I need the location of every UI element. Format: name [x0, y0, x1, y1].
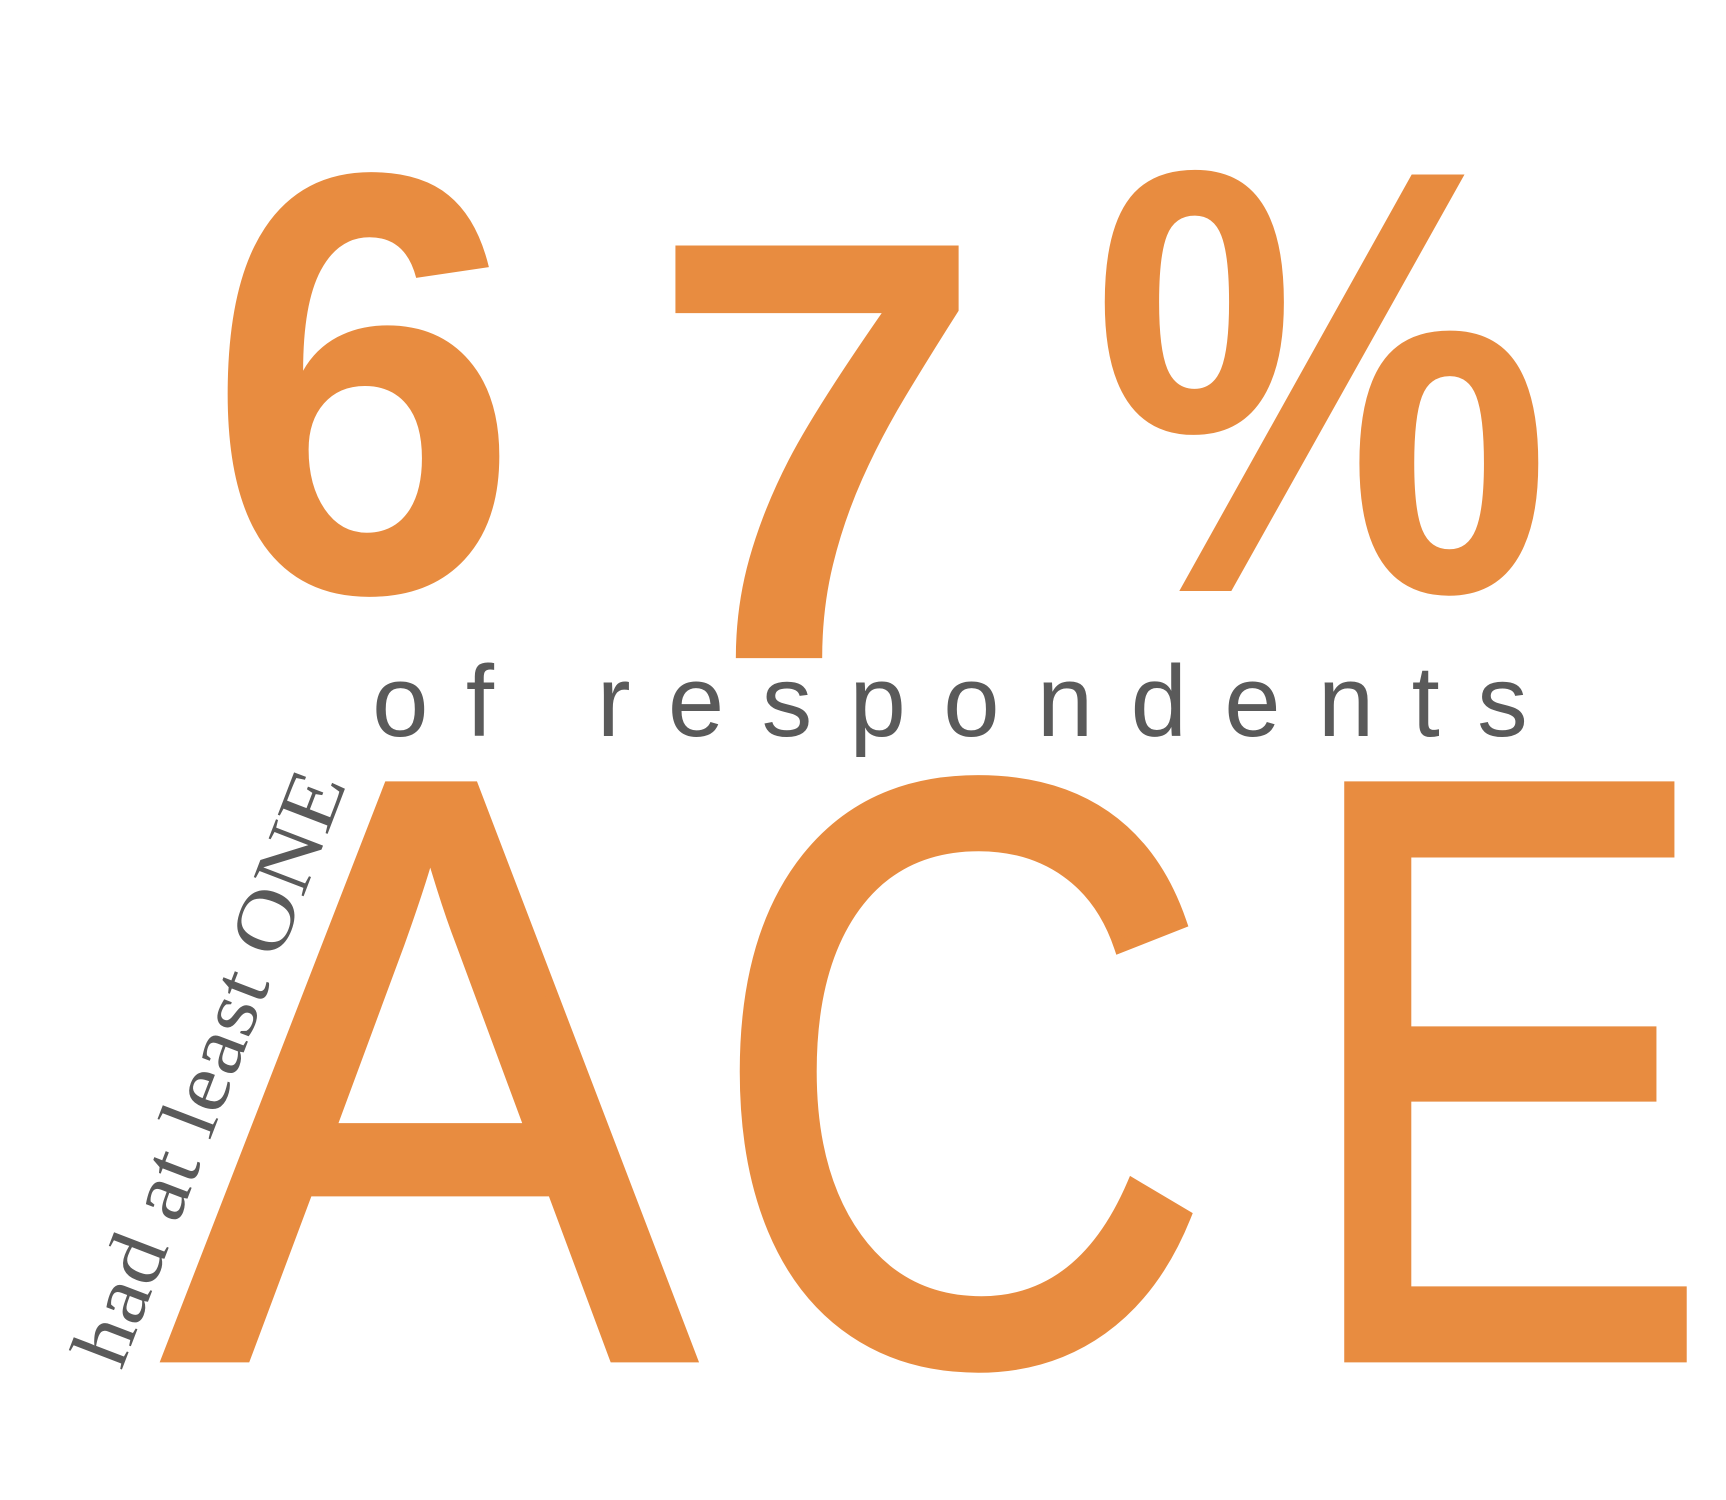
- big word: ACE: [167, 609, 1708, 1500]
- digit 7: 7: [650, 116, 985, 786]
- percent sign: %: [1092, 44, 1552, 720]
- digit 6: 6: [207, 49, 520, 719]
- big statistic: 67%: [207, 44, 1552, 786]
- rotated label: had at least ONE: had at least ONE: [53, 757, 364, 1378]
- subheading: of respondents: of respondents: [372, 645, 1528, 758]
